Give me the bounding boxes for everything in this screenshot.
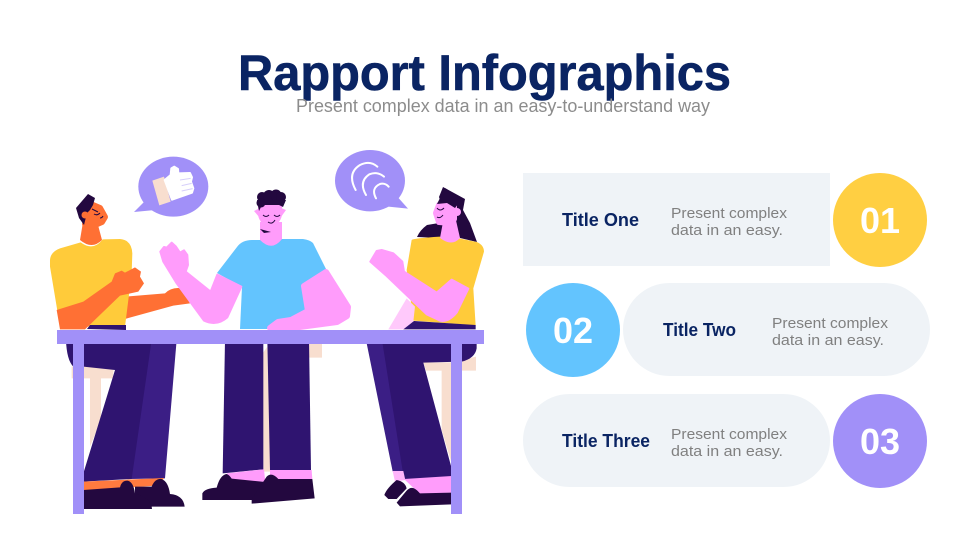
- badge 01: 01: [860, 200, 900, 241]
- yellow shirt: [407, 237, 484, 325]
- speech bubble: thumbs up: [134, 157, 208, 217]
- neck: [440, 216, 460, 242]
- hair: [256, 190, 286, 211]
- face: [85, 205, 105, 225]
- forearm and hand: [57, 267, 144, 329]
- left arm: [160, 243, 241, 323]
- back hair: [439, 187, 477, 242]
- illustration: three people at a table: [50, 150, 484, 514]
- card 3 text: Present complex: [671, 426, 788, 443]
- card 3 text: data in an easy.: [671, 443, 783, 460]
- badge 03: 03: [860, 421, 900, 462]
- card 3 text: [671, 426, 788, 460]
- left person legs and chair: [66, 340, 185, 509]
- card 1 text: data in an easy.: [671, 222, 783, 239]
- blue shirt: [217, 239, 327, 329]
- subtitle: Present complex data in an easy-to-understand way: [296, 96, 710, 116]
- card 3 heading: Title Three: [562, 431, 650, 451]
- card 2 text: [772, 315, 889, 349]
- neck: [260, 222, 282, 247]
- badge 03: [833, 394, 927, 488]
- speech bubble: sound waves: [335, 150, 408, 211]
- extended arm: [125, 288, 190, 319]
- face: [258, 203, 282, 227]
- card 1 text: [671, 205, 788, 239]
- card 2 text: data in an easy.: [772, 332, 884, 349]
- title: Rapport Infographics: [238, 45, 731, 101]
- card 2: [526, 283, 930, 377]
- card 1 text: Present complex: [671, 205, 788, 222]
- card 2 text: Present complex: [772, 315, 889, 332]
- badge 02: [526, 283, 620, 377]
- front arm: [370, 250, 468, 321]
- right person torso and head: [370, 187, 484, 329]
- card 1: [523, 173, 927, 267]
- card 3: [523, 394, 927, 488]
- right person legs and chair: [366, 340, 477, 506]
- face: [436, 205, 454, 223]
- left person torso and head: [50, 194, 190, 330]
- card 2 heading: Title Two: [663, 320, 736, 340]
- back arm: [388, 298, 415, 329]
- neck: [80, 222, 102, 245]
- hair: [76, 194, 95, 225]
- table: [57, 330, 484, 514]
- card 1 heading: Title One: [562, 210, 639, 230]
- ears: [254, 208, 286, 218]
- middle person torso and head: [160, 190, 348, 329]
- badge 02: 02: [553, 310, 593, 351]
- right arm: [270, 272, 348, 328]
- middle person legs: [202, 340, 322, 504]
- yellow shirt: [50, 239, 132, 327]
- badge 01: [833, 173, 927, 267]
